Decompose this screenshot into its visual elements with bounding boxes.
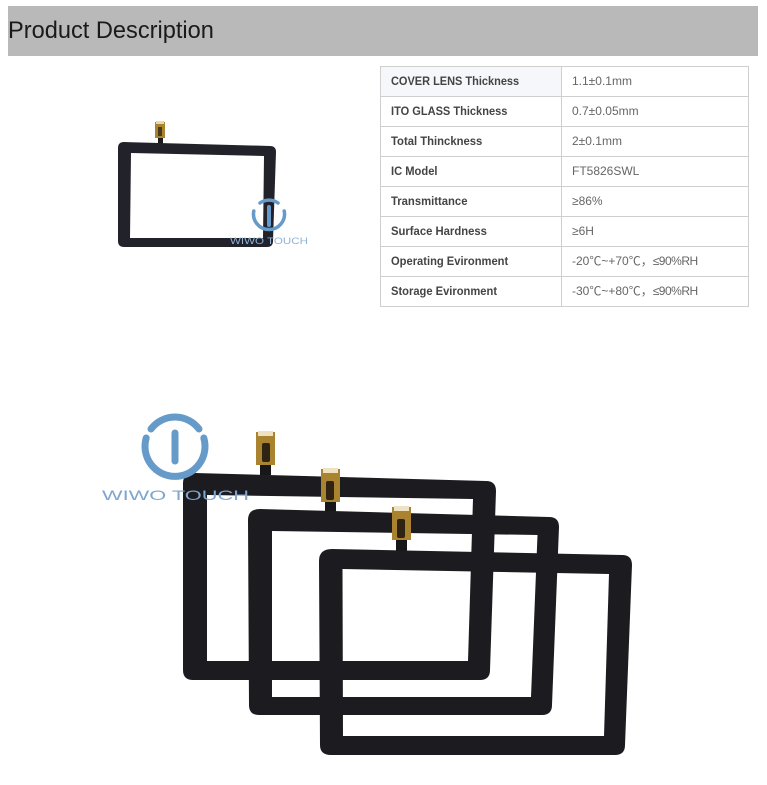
row: cover lens thickness: COVER LENS Thickness — [391, 74, 519, 88]
row: operating environment: -20℃~+70℃，≤90%RH — [572, 254, 698, 268]
row: transmittance — [381, 187, 748, 217]
row: surface hardness — [381, 217, 748, 247]
row: operating environment — [381, 247, 748, 277]
row: IC model: FT5826SWL — [572, 164, 639, 178]
panel 1 with connector — [183, 431, 496, 680]
large watermark logo: WIWO TOUCH — [102, 487, 249, 503]
row: total thickness — [381, 127, 748, 157]
row: total thickness: 2±0.1mm — [572, 134, 622, 148]
row: total thickness: Total Thinckness — [391, 134, 482, 148]
large product photo: three touch panels — [102, 417, 632, 755]
large watermark logo — [102, 417, 249, 503]
row: transmittance: Transmittance — [391, 194, 467, 208]
row: ITO glass thickness: 0.7±0.05mm — [572, 104, 639, 118]
row: ITO glass thickness: ITO GLASS Thickness — [391, 104, 507, 118]
row: cover lens thickness: 1.1±0.1mm — [572, 74, 632, 88]
panel 3 with connector — [319, 506, 632, 755]
title: Product Description — [8, 18, 214, 44]
small FPC connector — [155, 121, 165, 144]
row: surface hardness: Surface Hardness — [391, 224, 487, 238]
row: storage environment — [391, 277, 698, 306]
row: surface hardness: ≥6H — [572, 224, 594, 238]
small panel frame — [118, 142, 276, 247]
small product photo: touch panel — [118, 121, 308, 247]
row: IC model: IC Model — [391, 164, 438, 178]
heading bar: Product Description — [8, 6, 758, 56]
row: cover lens thickness — [381, 67, 748, 97]
row: IC model — [381, 157, 748, 187]
row: operating environment: Operating Evironment — [391, 254, 508, 268]
small watermark logo: WIWO TOUCH — [230, 236, 308, 247]
small watermark logo — [230, 200, 308, 247]
panel 2 with connector — [248, 468, 559, 715]
row: storage environment: Storage Evironment — [391, 284, 497, 298]
specification table — [380, 66, 749, 307]
row: storage environment: -30℃~+80℃，≤90%RH — [572, 284, 698, 298]
row: ITO glass thickness — [381, 97, 748, 127]
row: transmittance: ≥86% — [572, 194, 603, 208]
